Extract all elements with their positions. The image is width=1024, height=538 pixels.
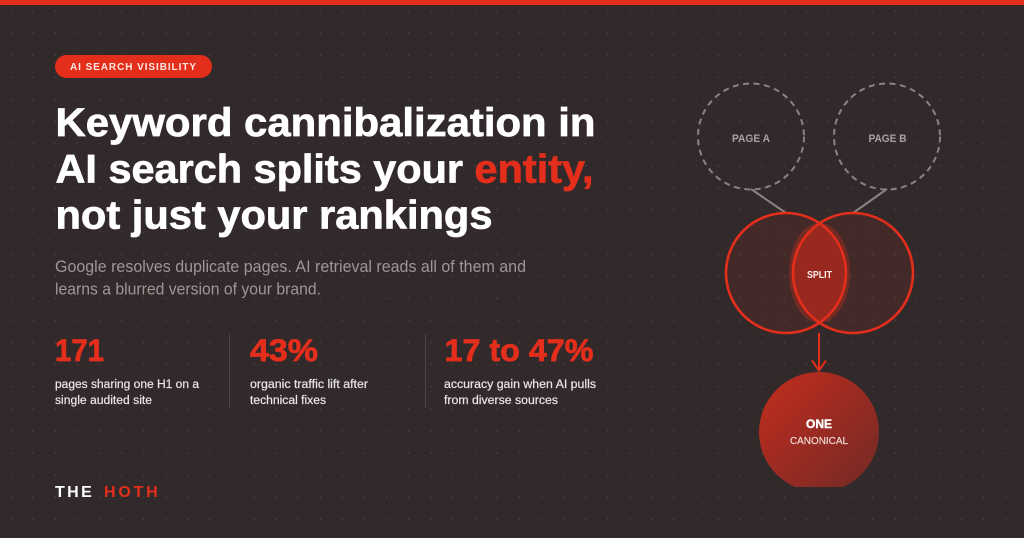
stat: 171 pages	[55, 332, 200, 407]
stat: 17 to 47%	[444, 332, 596, 407]
title: AI search splits your entity,	[56, 148, 594, 192]
stat: 43%: organic traffic lift after	[250, 379, 368, 391]
stat: 43%	[250, 332, 368, 407]
badge: AI search visibility: AI SEARCH VISIBILITY	[70, 62, 196, 73]
stat: 17 to 47%: from diverse sources	[444, 395, 558, 407]
venn diagram: split: SPLIT	[807, 269, 832, 281]
stat: 171 pages: pages sharing one H1 on a	[55, 379, 200, 391]
diagram: page B circle: PAGE B	[868, 133, 907, 145]
arrow: down to canonical	[812, 333, 826, 370]
stat: 171 pages: 171	[55, 332, 104, 368]
stat: 17 to 47%: 17 to 47%	[444, 332, 594, 368]
diagram: page A circle	[698, 84, 804, 190]
logo: The Hoth	[55, 484, 161, 501]
top accent bar	[0, 0, 1024, 5]
badge: AI search visibility	[55, 55, 212, 78]
venn diagram: split	[726, 213, 913, 333]
diagram: page B circle	[834, 84, 940, 190]
logo: The Hoth: HOTH	[104, 484, 161, 501]
stat: 171 pages: single audited site	[55, 395, 152, 407]
subtitle	[55, 258, 526, 298]
diagram: page A circle: PAGE A	[732, 133, 770, 145]
connector: page B to venn	[853, 189, 887, 213]
subtitle: Google resolves duplicate pages. AI retrieval reads all of them and	[55, 258, 526, 276]
title: not just your rankings	[56, 194, 492, 238]
stat: 43%: technical fixes	[250, 395, 326, 407]
canonical circle: ONE	[806, 417, 832, 431]
title	[56, 101, 596, 238]
stat: 17 to 47%: accuracy gain when AI pulls	[444, 379, 596, 391]
stat: 43%: 43%	[250, 332, 318, 368]
title: Keyword cannibalization in	[56, 101, 596, 145]
canonical circle	[759, 372, 879, 492]
subtitle: learns a blurred version of your brand.	[55, 280, 321, 298]
logo: The Hoth: THE	[55, 484, 94, 501]
connector: page A to venn	[751, 189, 786, 213]
canonical circle: CANONICAL	[790, 436, 848, 447]
